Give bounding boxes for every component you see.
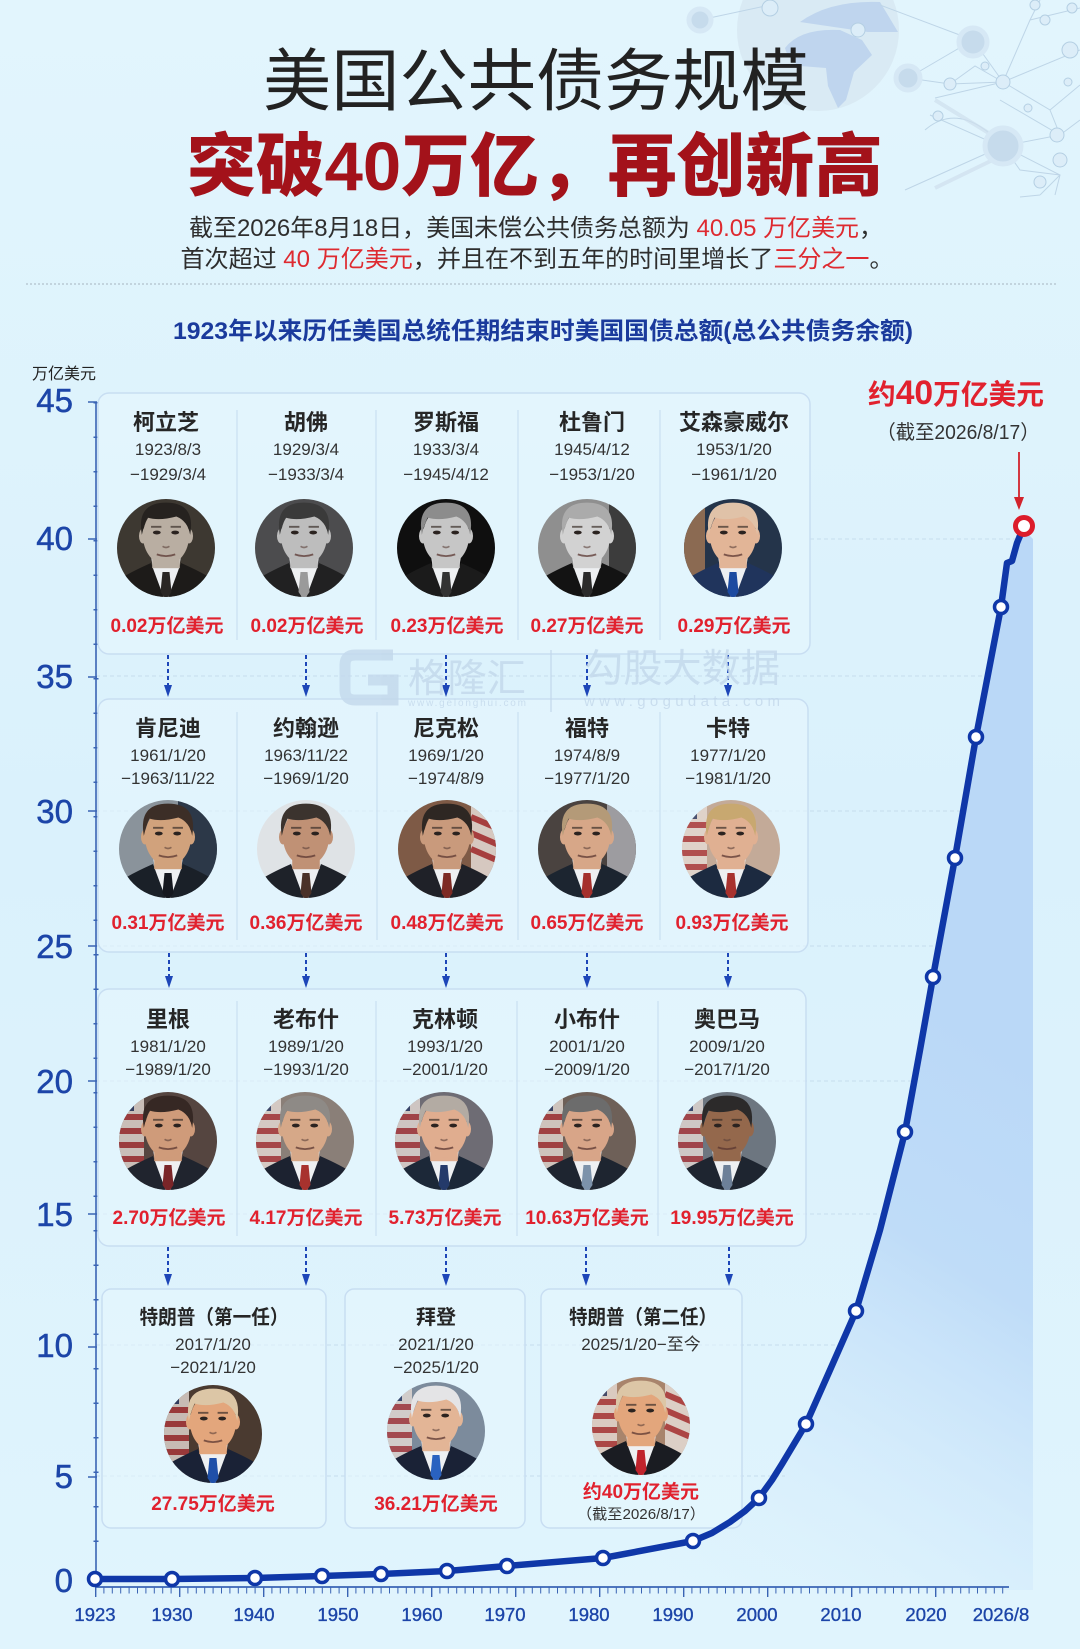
y axis labels: 15 [36, 1196, 73, 1233]
y axis labels: 10 [36, 1327, 73, 1364]
watermark: www.gelonghui.com [407, 698, 526, 709]
panel: 特朗普第二任 [541, 1289, 742, 1528]
president: 小布什: 小布什 [554, 1007, 620, 1032]
president: 尼克松: 尼克松 [413, 716, 479, 741]
president: 老布什 [250, 1007, 362, 1229]
president: 罗斯福: 罗斯福 [413, 410, 479, 435]
x axis labels: 1950 [317, 1604, 359, 1625]
president: 奥巴马 [670, 1007, 794, 1229]
president: 老布什: 4.17万亿美元 [250, 1207, 362, 1229]
portrait: 特朗普 [161, 1384, 265, 1486]
panel: row 2 presidents [98, 699, 808, 952]
arrows: row 2 to row 3 [165, 953, 732, 988]
president: 尼克松: 1969/1/20 [408, 746, 484, 765]
president: 罗斯福 [391, 410, 503, 637]
arrows: row 3 to row 4 [164, 1247, 733, 1286]
president: 福特: −1977/1/20 [544, 769, 630, 788]
president: 里根 [113, 1007, 225, 1229]
president: 艾森豪威尔: 0.29万亿美元 [678, 615, 790, 637]
portrait: 特朗普 [589, 1376, 693, 1478]
president: 肯尼迪: −1963/11/22 [121, 769, 215, 788]
president: 福特: 福特 [565, 716, 609, 741]
y axis labels: 40 [36, 520, 73, 557]
callout: about 40 trillion: （截至2026/8/17） [876, 421, 1040, 444]
president: 胡佛: 0.02万亿美元 [251, 615, 363, 637]
president: 胡佛: −1933/3/4 [268, 465, 344, 484]
callout: about 40 trillion [868, 374, 1044, 510]
president: 奥巴马: 奥巴马 [694, 1007, 760, 1032]
panel: 特朗普第二任: 特朗普（第二任） [569, 1306, 717, 1329]
arrows: row 1 to row 2 [164, 655, 732, 697]
president: 肯尼迪: 肯尼迪 [135, 716, 201, 741]
president: 胡佛: 1929/3/4 [273, 440, 339, 459]
president: 里根: −1989/1/20 [125, 1060, 211, 1079]
president: 老布什: 老布什 [273, 1007, 339, 1032]
president: 艾森豪威尔: −1961/1/20 [691, 465, 777, 484]
president: 小布什: 10.63万亿美元 [525, 1207, 649, 1229]
president: 约翰逊: 1963/11/22 [264, 746, 348, 765]
president: 卡特: −1981/1/20 [685, 769, 771, 788]
x axis labels: 2000 [736, 1604, 778, 1625]
area under curve [95, 530, 1033, 1590]
president: 柯立芝: −1929/3/4 [130, 465, 206, 484]
president: 杜鲁门: −1953/1/20 [549, 465, 635, 484]
president: 尼克松: 0.48万亿美元 [391, 912, 503, 934]
y axis labels: 45 [36, 382, 73, 419]
curve data points [88, 600, 1008, 1586]
x axis labels: 1990 [652, 1604, 694, 1625]
president: 福特: 1974/8/9 [554, 746, 620, 765]
president: 卡特: 0.93万亿美元 [676, 912, 788, 934]
panel: 特朗普第二任: 2025/1/20−至今 [581, 1335, 701, 1354]
x axis labels: 2010 [820, 1604, 862, 1625]
y axis unit: 万亿美元 [32, 365, 96, 383]
president: 杜鲁门: 1945/4/12 [554, 440, 630, 459]
x axis labels: 1960 [401, 1604, 443, 1625]
president: 老布什: 1989/1/20 [268, 1037, 344, 1056]
x axis [74, 1587, 1029, 1625]
decorative globe and network [689, 0, 1080, 197]
y axis labels: 25 [36, 928, 73, 965]
president: 奥巴马: −2017/1/20 [684, 1060, 770, 1079]
title [187, 44, 883, 205]
x axis labels [74, 1604, 1029, 1625]
panel: 特朗普第一任: 特朗普（第一任） [140, 1306, 288, 1329]
intro text: 截至2026年8月18日，美国未偿公共债务总额为 40.05 万亿美元， [189, 215, 883, 242]
watermark: G logo [345, 655, 393, 700]
president: 罗斯福: −1945/4/12 [403, 465, 489, 484]
president: 柯立芝: 柯立芝 [133, 410, 199, 435]
x axis labels: 2026/8 [973, 1604, 1029, 1625]
president: 里根: 1981/1/20 [130, 1037, 206, 1056]
panel: 拜登: −2025/1/20 [393, 1358, 479, 1377]
president: 奥巴马: 2009/1/20 [689, 1037, 765, 1056]
president: 肯尼迪 [112, 716, 224, 934]
panel: 拜登: 36.21万亿美元 [374, 1493, 498, 1515]
president: 卡特 [676, 716, 788, 934]
president: 杜鲁门: 杜鲁门 [559, 410, 625, 435]
x axis labels: 1940 [233, 1604, 275, 1625]
president: 罗斯福: 0.23万亿美元 [391, 615, 503, 637]
president: 柯立芝: 0.02万亿美元 [111, 615, 223, 637]
watermark: www.gogudata.com [583, 693, 780, 710]
president: 卡特: 卡特 [706, 716, 750, 741]
title line 2: 突破40万亿，再创新高 [187, 128, 883, 205]
president: 福特: 0.65万亿美元 [531, 912, 643, 934]
arrow to latest point [1014, 452, 1024, 510]
intro text: 首次超过 40 万亿美元，并且在不到五年的时间里增长了三分之一。 [180, 246, 894, 273]
y axis labels: 35 [36, 658, 73, 695]
y axis labels: 5 [55, 1458, 73, 1495]
president: 小布什: −2009/1/20 [544, 1060, 630, 1079]
chart subtitle: 1923年以来历任美国总统任期结束时美国国债总额(总公共债务余额) [173, 318, 913, 345]
president: 艾森豪威尔 [678, 410, 790, 637]
panel: row 1 presidents [98, 393, 810, 654]
x axis labels: 1980 [568, 1604, 610, 1625]
panel: 特朗普第一任: 2017/1/20 [175, 1335, 251, 1354]
y axis [36, 382, 97, 1599]
president: 小布什: 2001/1/20 [549, 1037, 625, 1056]
x axis labels: 1970 [484, 1604, 526, 1625]
y axis labels: 0 [55, 1562, 73, 1599]
president: 杜鲁门: 0.27万亿美元 [531, 615, 643, 637]
y axis labels [36, 382, 73, 1599]
president: 老布什: −1993/1/20 [263, 1060, 349, 1079]
president: 约翰逊: 约翰逊 [273, 716, 339, 741]
x axis labels: 2020 [905, 1604, 947, 1625]
president: 克林顿 [389, 1007, 501, 1229]
president: 约翰逊: −1969/1/20 [263, 769, 349, 788]
president: 克林顿: −2001/1/20 [402, 1060, 488, 1079]
president: 肯尼迪: 0.31万亿美元 [112, 912, 224, 934]
president: 柯立芝 [111, 410, 223, 637]
president: 福特 [531, 716, 643, 934]
panel: 特朗普第一任 [102, 1289, 326, 1528]
president: 小布什 [525, 1007, 649, 1229]
watermark: 勾股大数据 [584, 648, 780, 691]
president: 尼克松 [391, 716, 503, 934]
president: 艾森豪威尔: 艾森豪威尔 [679, 410, 789, 435]
president: 约翰逊 [250, 716, 362, 934]
president: 胡佛: 胡佛 [284, 410, 328, 435]
panel: 特朗普第二任: （截至2026/8/17） [577, 1506, 705, 1523]
president: 肯尼迪: 1961/1/20 [130, 746, 206, 765]
president: 柯立芝: 1923/8/3 [135, 440, 201, 459]
president: 杜鲁门 [531, 410, 643, 637]
president: 克林顿: 5.73万亿美元 [389, 1207, 501, 1229]
title line 1: 美国公共债务规模 [263, 44, 809, 120]
y axis labels: 20 [36, 1063, 73, 1100]
panel: 拜登: 2021/1/20 [398, 1335, 474, 1354]
president: 约翰逊: 0.36万亿美元 [250, 912, 362, 934]
president: 卡特: 1977/1/20 [690, 746, 766, 765]
grid lines [96, 539, 1016, 1476]
president: 艾森豪威尔: 1953/1/20 [696, 440, 772, 459]
intro text [180, 215, 894, 273]
president: 尼克松: −1974/8/9 [408, 769, 484, 788]
portrait: 拜登 [384, 1381, 488, 1483]
panel: 特朗普第二任: 约40万亿美元 [583, 1481, 699, 1503]
panel: row 3 presidents [98, 989, 806, 1246]
president: 克林顿: 克林顿 [412, 1007, 478, 1032]
latest point marker [1016, 518, 1032, 534]
president: 里根: 里根 [146, 1007, 190, 1032]
panel: 拜登: 拜登 [416, 1306, 456, 1329]
president: 克林顿: 1993/1/20 [407, 1037, 483, 1056]
watermark [345, 648, 780, 712]
callout: about 40 trillion: 约40万亿美元 [868, 374, 1044, 412]
panel: 特朗普第一任: −2021/1/20 [170, 1358, 256, 1377]
president: 胡佛 [251, 410, 363, 637]
panel: 拜登 [345, 1289, 525, 1528]
president: 罗斯福: 1933/3/4 [413, 440, 479, 459]
president: 里根: 2.70万亿美元 [113, 1207, 225, 1229]
debt curve [88, 518, 1032, 1586]
x axis labels: 1923 [74, 1604, 116, 1625]
x axis labels: 1930 [151, 1604, 193, 1625]
y axis labels: 30 [36, 793, 73, 830]
panel: 特朗普第一任: 27.75万亿美元 [151, 1493, 275, 1515]
president: 奥巴马: 19.95万亿美元 [670, 1207, 794, 1229]
watermark: 格隆汇 [408, 658, 526, 701]
